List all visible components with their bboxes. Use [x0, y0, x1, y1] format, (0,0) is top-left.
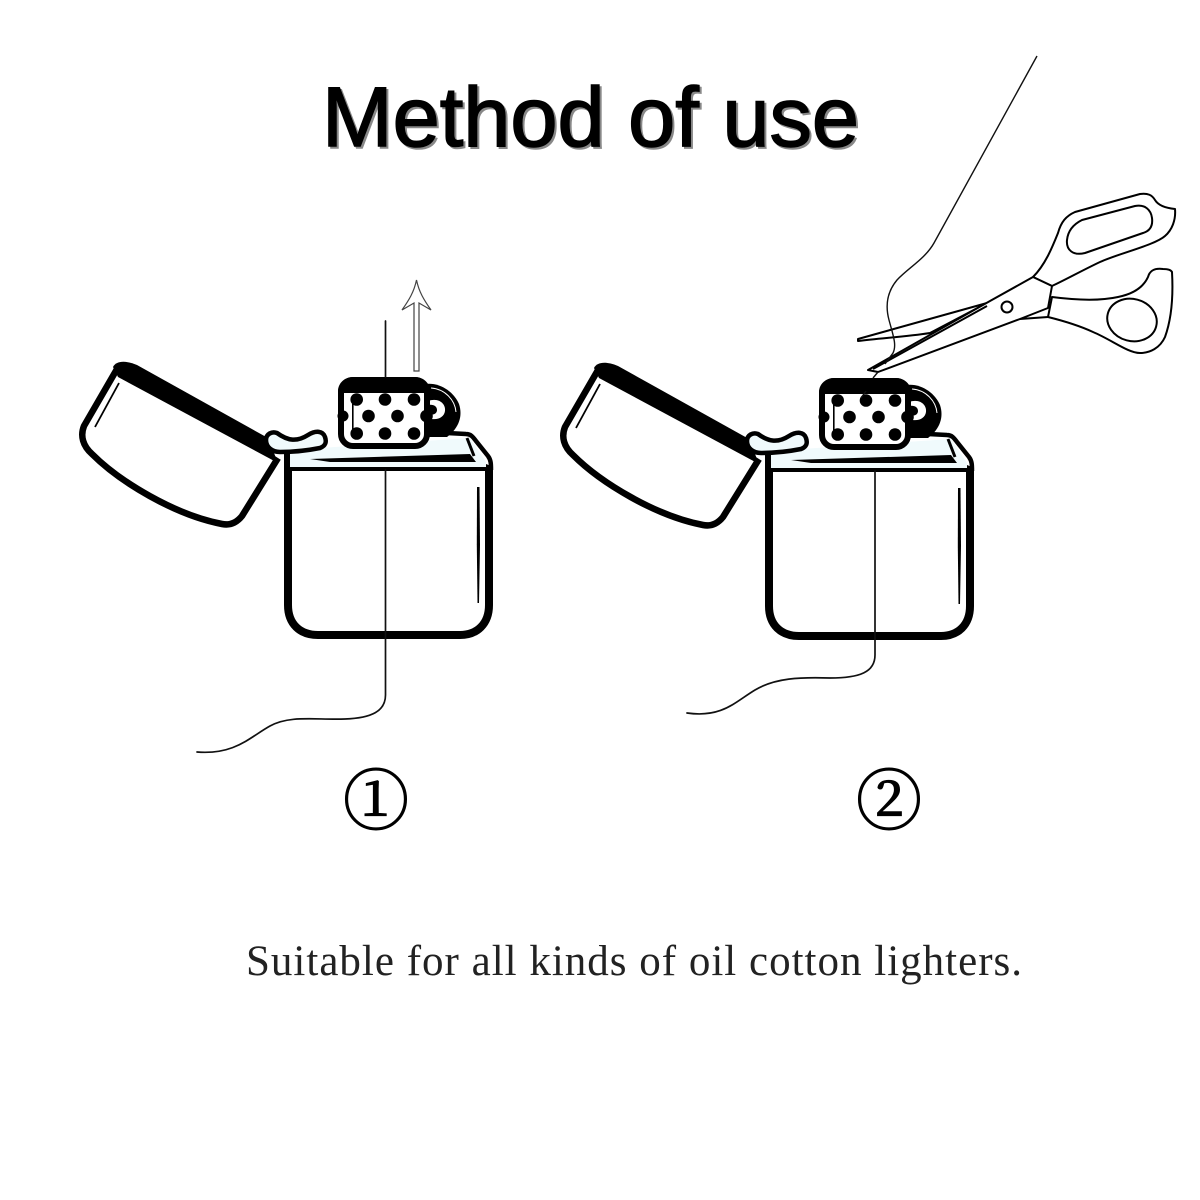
- upper blade: [858, 303, 987, 341]
- caption: Suitable for all kinds of oil cotton lighters.: [246, 938, 1022, 985]
- arrow: pull upward: [402, 280, 431, 371]
- scissors: [858, 194, 1175, 372]
- lighter step 2: [563, 363, 974, 636]
- lower handle finger hole: [1102, 293, 1162, 347]
- step number 1: ①: [343, 748, 409, 843]
- step number 2: ②: [856, 748, 922, 843]
- lower handle: [1048, 269, 1172, 353]
- lighter step 1: [82, 362, 493, 635]
- lower blade and pivot plate: [868, 277, 1052, 372]
- thread step 2: [687, 471, 875, 714]
- thread step 1: [197, 321, 386, 752]
- title: Method of use: [322, 70, 859, 164]
- upper handle: [1033, 194, 1175, 286]
- upper handle finger hole: [1067, 206, 1152, 254]
- thread end being cut: [861, 56, 1037, 398]
- pivot screw: [1002, 302, 1012, 312]
